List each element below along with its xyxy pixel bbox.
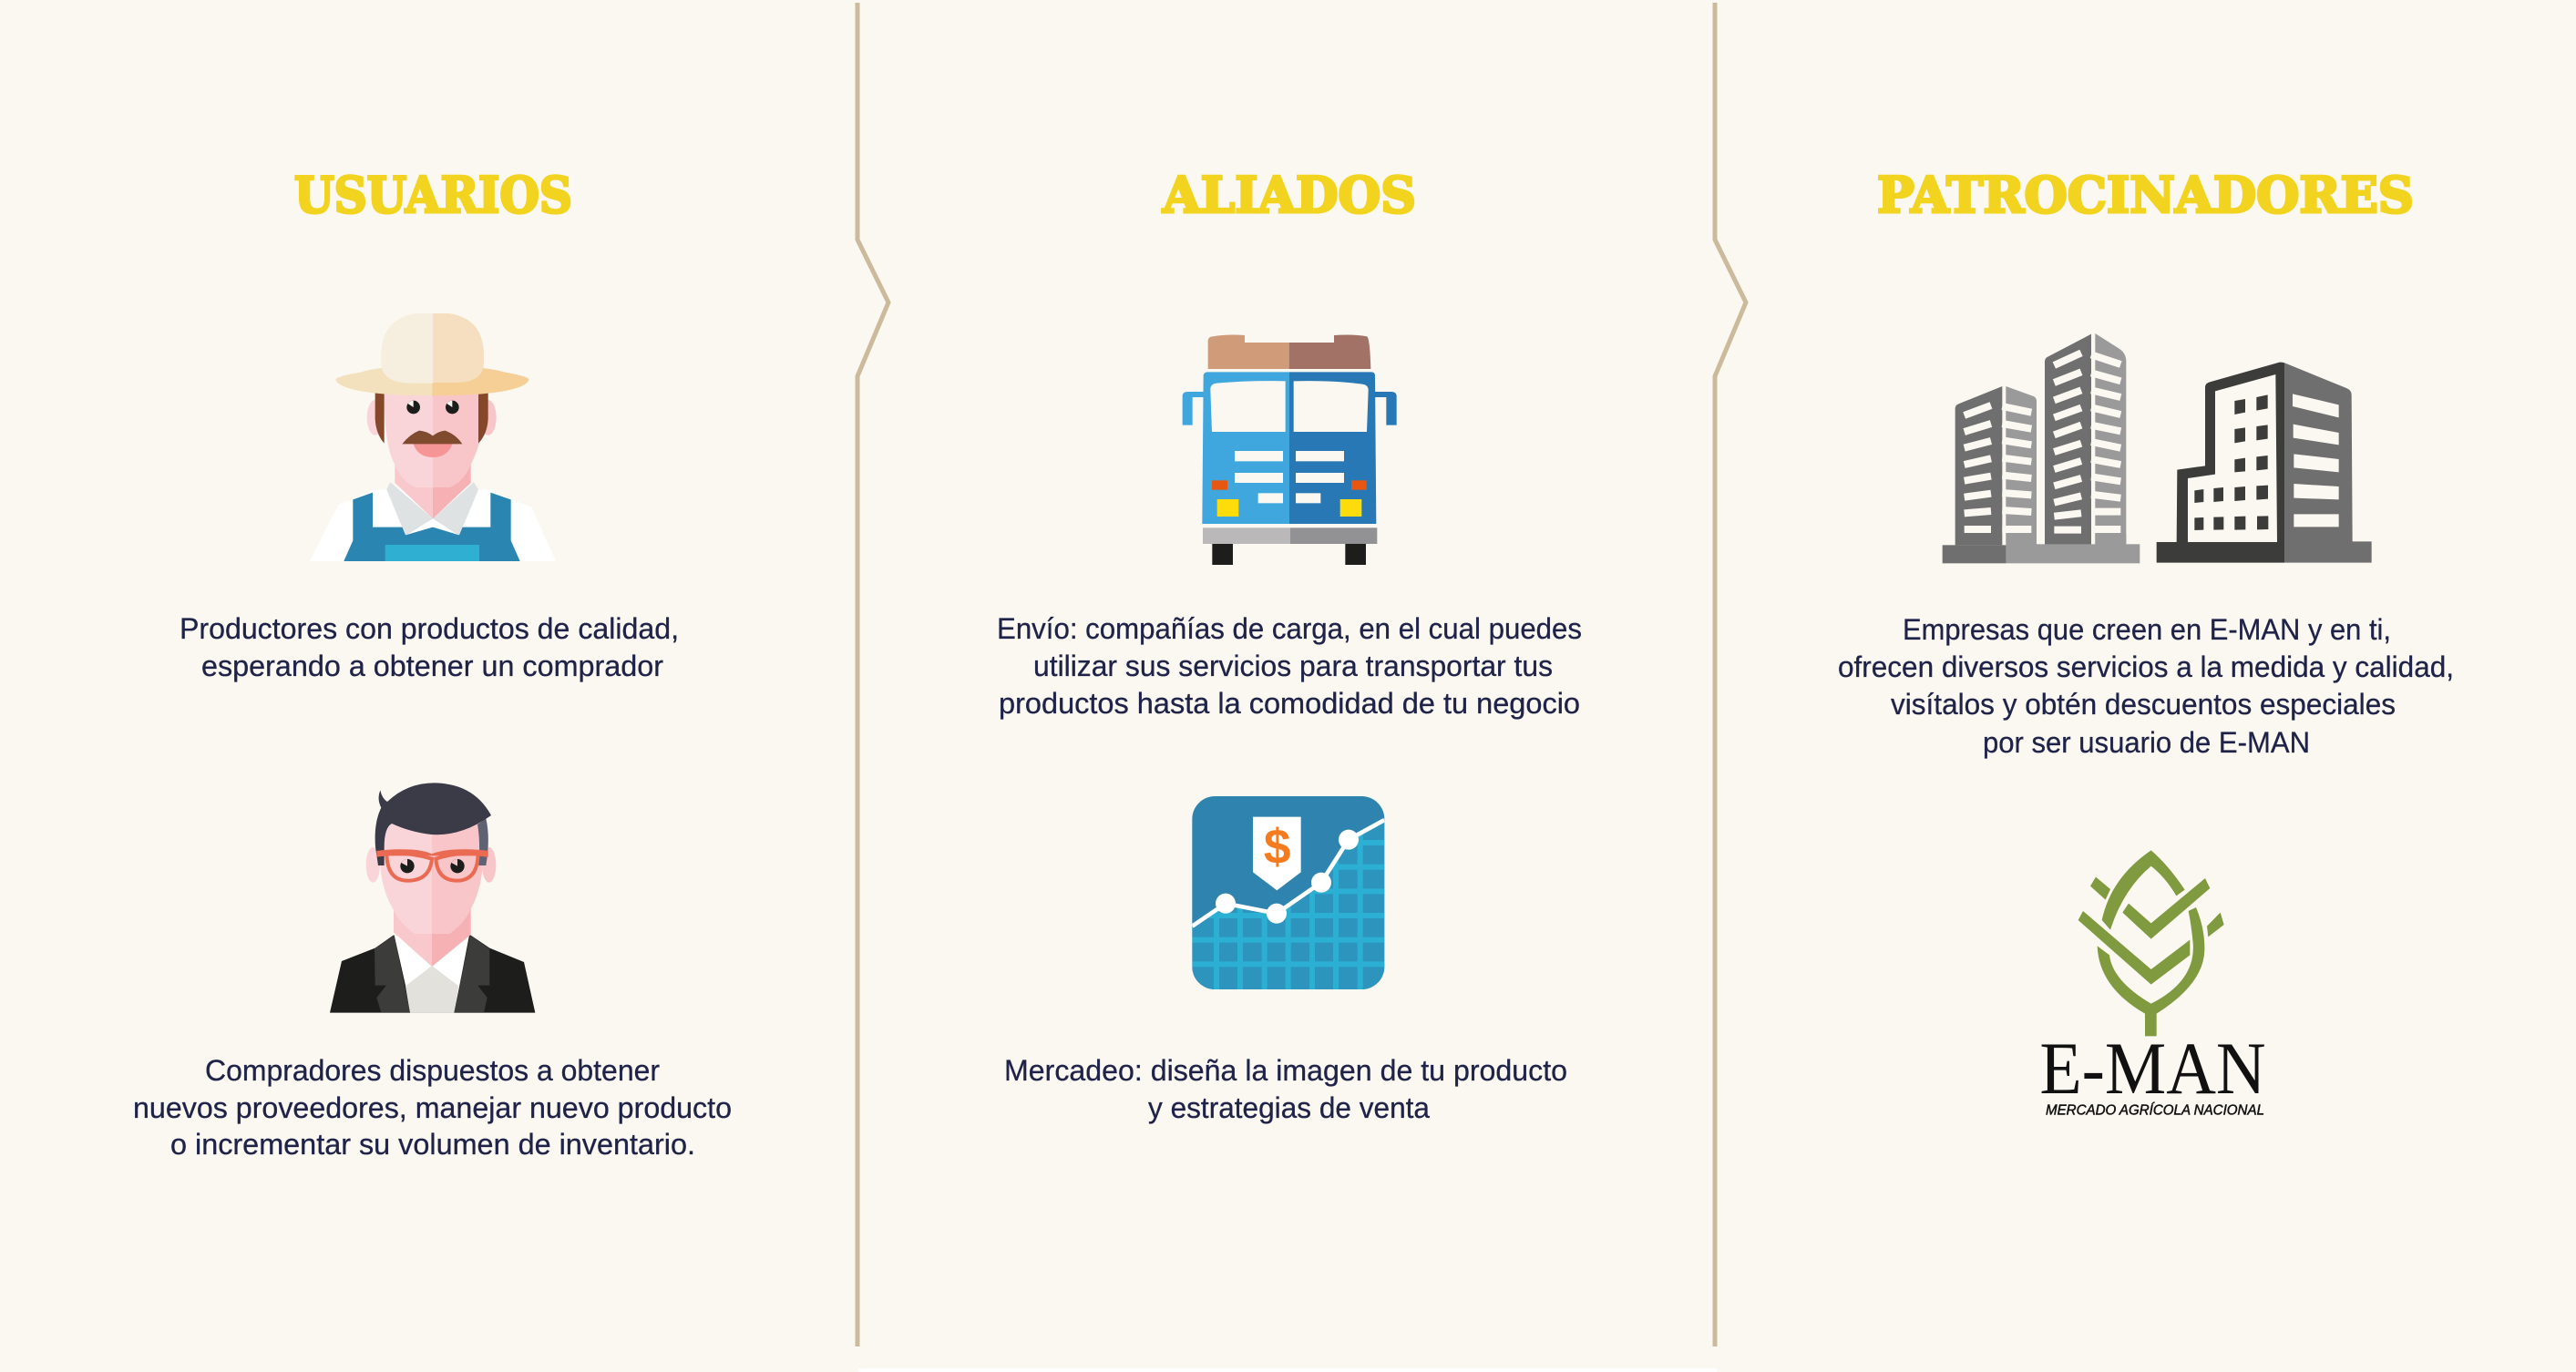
text: envio: utilizar sus servicios para transportar tus xyxy=(1033,650,1553,682)
icon: truck xyxy=(1183,335,1397,565)
text: empresas: ofrecen diversos servicios a la medida y calidad, xyxy=(1838,650,2454,683)
text: empresas: visítalos y obtén descuentos especiales xyxy=(1891,688,2396,721)
text: mercadeo: y estrategias de venta xyxy=(1148,1091,1430,1124)
text: compradores: o incrementar su volumen de inventario. xyxy=(170,1128,695,1161)
icon: buildings xyxy=(1943,333,2372,563)
logo: e-man: E-MAN xyxy=(2039,1027,2266,1110)
text: envio: productos hasta la comodidad de tu negocio xyxy=(999,687,1580,720)
text: envio xyxy=(997,612,1582,720)
heading: patrocinadores: PATROCINADORES xyxy=(1877,166,2414,224)
icon: marketing chart xyxy=(1192,796,1384,989)
text: compradores xyxy=(133,1054,732,1161)
text: compradores: Compradores dispuestos a obtener xyxy=(205,1054,660,1087)
icon: marketing chart: $ xyxy=(1264,820,1291,874)
text: envio: Envío: compañías de carga, en el cual puedes xyxy=(997,612,1582,645)
logo: e-man xyxy=(2039,850,2266,1118)
text: mercadeo: Mercadeo: diseña la imagen de tu producto xyxy=(1004,1054,1567,1087)
text: productores: esperando a obtener un comprador xyxy=(201,650,663,682)
text: productores: Productores con productos de calidad, xyxy=(180,612,679,645)
icon: businessman xyxy=(330,783,535,1013)
divider arrow: aliados to patrocinadores xyxy=(1715,3,1746,1346)
text: compradores: nuevos proveedores, manejar nuevo producto xyxy=(133,1091,732,1124)
text: productores xyxy=(180,612,679,682)
divider arrow: usuarios to aliados xyxy=(857,3,888,1346)
text: mercadeo xyxy=(1004,1054,1567,1124)
heading: usuarios: USUARIOS xyxy=(294,166,572,224)
text: empresas: por ser usuario de E-MAN xyxy=(1983,726,2310,759)
icon: farmer xyxy=(310,313,556,561)
text: empresas xyxy=(1838,613,2454,759)
text: empresas: Empresas que creen en E-MAN y en ti, xyxy=(1903,613,2391,646)
heading: aliados: ALIADOS xyxy=(1162,166,1416,224)
logo: e-man: MERCADO AGRÍCOLA NACIONAL xyxy=(2046,1102,2264,1118)
